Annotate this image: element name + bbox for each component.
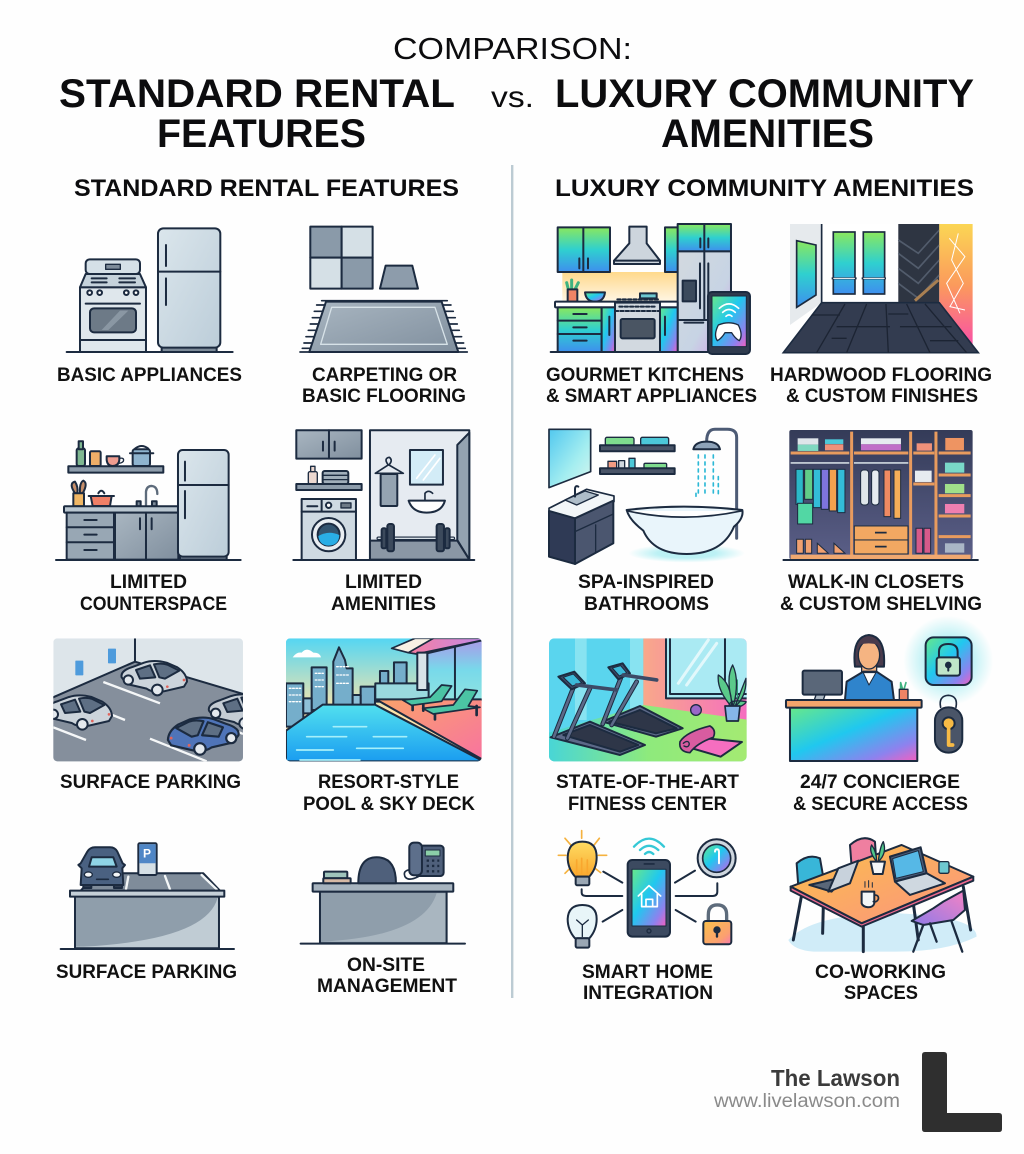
- panel: limited counterspace: [56, 441, 241, 615]
- icon: spa bathroom: [549, 429, 745, 564]
- heading: standard rental features: STANDARD RENTAL: [59, 72, 455, 116]
- icon: small kitchen: [56, 441, 241, 560]
- section heading: luxury: LUXURY COMMUNITY AMENITIES: [555, 175, 974, 202]
- panel: smart home: [558, 831, 736, 1004]
- section heading: standard: STANDARD RENTAL FEATURES: [74, 175, 459, 202]
- label: COUNTERSPACE: [80, 593, 227, 615]
- label: [80, 571, 227, 615]
- label: [302, 364, 466, 407]
- label: POOL & SKY DECK: [303, 793, 475, 815]
- label: GOURMET KITCHENS: [546, 364, 744, 386]
- icon: laundry, closet and gym: [293, 430, 474, 560]
- panel: limited amenities: [293, 430, 474, 615]
- label: [578, 571, 714, 615]
- label: LIMITED: [110, 571, 187, 593]
- label: & CUSTOM FINISHES: [786, 385, 978, 407]
- label: [582, 961, 713, 1004]
- panel: on-site management: [301, 843, 465, 997]
- footer brand: [713, 1052, 1002, 1132]
- heading: luxury community amenities: LUXURY COMMUNITY: [555, 72, 974, 116]
- label: SURFACE PARKING: [56, 961, 237, 983]
- panel: fitness center: [547, 637, 750, 815]
- label: [546, 364, 757, 407]
- label: CO-WORKING: [815, 961, 946, 983]
- website: www.livelawson.com: [713, 1091, 900, 1112]
- icon: closet: [783, 430, 979, 560]
- icon: smart kitchen: [551, 224, 750, 354]
- label: [331, 571, 436, 615]
- label: 24/7 CONCIERGE: [800, 771, 960, 793]
- label: CARPETING OR: [312, 364, 457, 386]
- icon: concierge desk, lock, key: [786, 616, 993, 761]
- label: INTEGRATION: [583, 982, 713, 1004]
- panel: concierge: [786, 616, 993, 815]
- panel: hardwood flooring: [770, 224, 992, 407]
- label: BASIC FLOORING: [302, 385, 466, 407]
- icon: co-working table: [788, 838, 977, 952]
- panel: carpeting: [300, 227, 467, 407]
- icon: smart home network: [558, 831, 736, 948]
- icon: treadmills: [547, 637, 750, 763]
- label: [556, 771, 739, 815]
- label: BATHROOMS: [584, 593, 709, 615]
- panel: resort pool: [286, 638, 483, 815]
- label: BASIC APPLIANCES: [57, 364, 242, 386]
- icon: tiles and rug: [300, 227, 467, 352]
- icon: parked car on deck: [61, 843, 234, 949]
- panel: basic appliances: [57, 228, 242, 386]
- icon: hardwood room: [783, 224, 978, 353]
- label: [793, 771, 968, 815]
- label: HARDWOOD FLOORING: [770, 364, 992, 386]
- logo: L mark: [922, 1052, 1002, 1132]
- label: [303, 771, 475, 815]
- label: AMENITIES: [331, 593, 436, 615]
- versus: vs.: [491, 81, 534, 114]
- label: [780, 571, 982, 615]
- icon: desk and phone: [301, 843, 465, 944]
- panel: co-working: [788, 838, 977, 1004]
- label: & SECURE ACCESS: [793, 793, 968, 815]
- heading: standard rental features: FEATURES: [157, 112, 366, 156]
- panel: surface parking structure: [56, 843, 237, 983]
- icon: parking lot scene: [53, 638, 243, 762]
- label: & SMART APPLIANCES: [546, 385, 757, 407]
- heading: luxury community amenities: AMENITIES: [661, 112, 874, 156]
- label: [770, 364, 992, 407]
- panel: surface parking lot: [53, 638, 243, 788]
- label: [815, 961, 946, 1004]
- label: & CUSTOM SHELVING: [780, 593, 982, 615]
- icon: stove and fridge: [67, 228, 233, 352]
- label: MANAGEMENT: [317, 975, 457, 997]
- panel: spa bathrooms: [549, 429, 745, 615]
- icon: pool and sky deck: [286, 638, 483, 761]
- label: STATE-OF-THE-ART: [556, 771, 739, 793]
- label: SPACES: [844, 982, 918, 1004]
- title block: [59, 31, 974, 156]
- label: SURFACE PARKING: [60, 771, 241, 793]
- label: ON-SITE: [347, 954, 425, 976]
- label: SPA-INSPIRED: [578, 571, 714, 593]
- label: RESORT-STYLE: [318, 771, 459, 793]
- heading: standard rental features: [59, 72, 455, 156]
- label: [317, 954, 457, 997]
- label: LIMITED: [345, 571, 422, 593]
- brand name: The Lawson: [771, 1065, 900, 1091]
- panel: gourmet kitchens: [546, 224, 757, 407]
- icon: parked car on deck: P: [143, 846, 151, 860]
- heading: luxury community amenities: [555, 72, 974, 156]
- title: comparison: COMPARISON:: [393, 31, 632, 66]
- label: SMART HOME: [582, 961, 713, 983]
- label: FITNESS CENTER: [568, 793, 727, 815]
- panel: walk-in closets: [780, 430, 982, 615]
- label: WALK-IN CLOSETS: [788, 571, 964, 593]
